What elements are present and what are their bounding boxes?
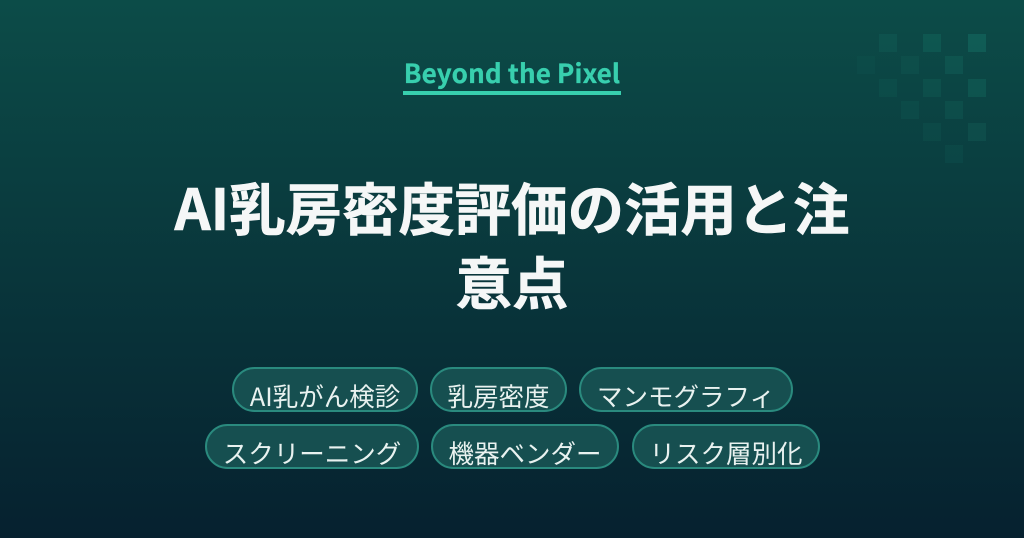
tag: 機器ベンダー: 機器ベンダー — [448, 434, 602, 471]
title — [174, 166, 850, 321]
tag: スクリーニング: スクリーニング — [223, 434, 401, 471]
tag: リスク層別化 — [632, 424, 820, 469]
tag: 乳房密度 — [430, 367, 567, 412]
decorative pixel grid icon — [879, 34, 986, 141]
title: AI乳房密度評価の活用と注 — [174, 166, 850, 247]
tag: AI乳がん検診: AI乳がん検診 — [250, 377, 400, 414]
brand label: Beyond the Pixel: Beyond the Pixel — [404, 54, 620, 91]
tag: マンモグラフィ: マンモグラフィ — [597, 377, 775, 414]
tag: AI乳がん検診 — [232, 367, 418, 412]
title: 意点 — [456, 240, 568, 321]
tag: リスク層別化: リスク層別化 — [649, 434, 802, 471]
tag: マンモグラフィ — [579, 367, 793, 412]
tag: スクリーニング — [205, 424, 419, 469]
tag: 機器ベンダー — [431, 424, 619, 469]
tag: 乳房密度: 乳房密度 — [447, 377, 550, 414]
tag list — [205, 367, 820, 471]
